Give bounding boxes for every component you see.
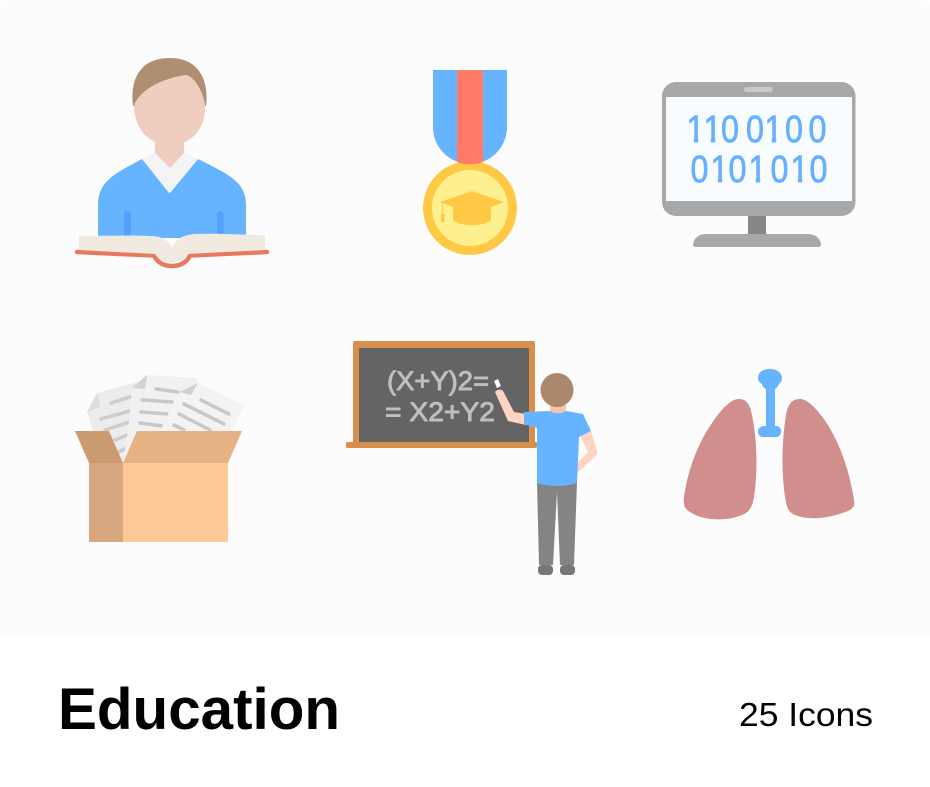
icon: lungs (684, 369, 854, 519)
icon count: 25 Icons (739, 696, 873, 733)
binary code text (686, 109, 827, 191)
icon: medal with graduation cap (423, 70, 517, 255)
icon: student reading a book (77, 58, 267, 266)
formula text: (X+Y)2= (387, 366, 489, 396)
icon: cardboard box of papers (75, 375, 244, 542)
binary code text: 1100100 (686, 109, 827, 151)
icon: teacher at the board (494, 373, 598, 575)
formula text: = X2+Y2 (385, 397, 495, 427)
title: Education (58, 677, 340, 742)
icon: computer monitor with binary code (662, 82, 856, 247)
icon: blackboard with formula (346, 341, 537, 448)
binary code text: 0101010 (690, 149, 827, 191)
formula text (385, 366, 495, 427)
